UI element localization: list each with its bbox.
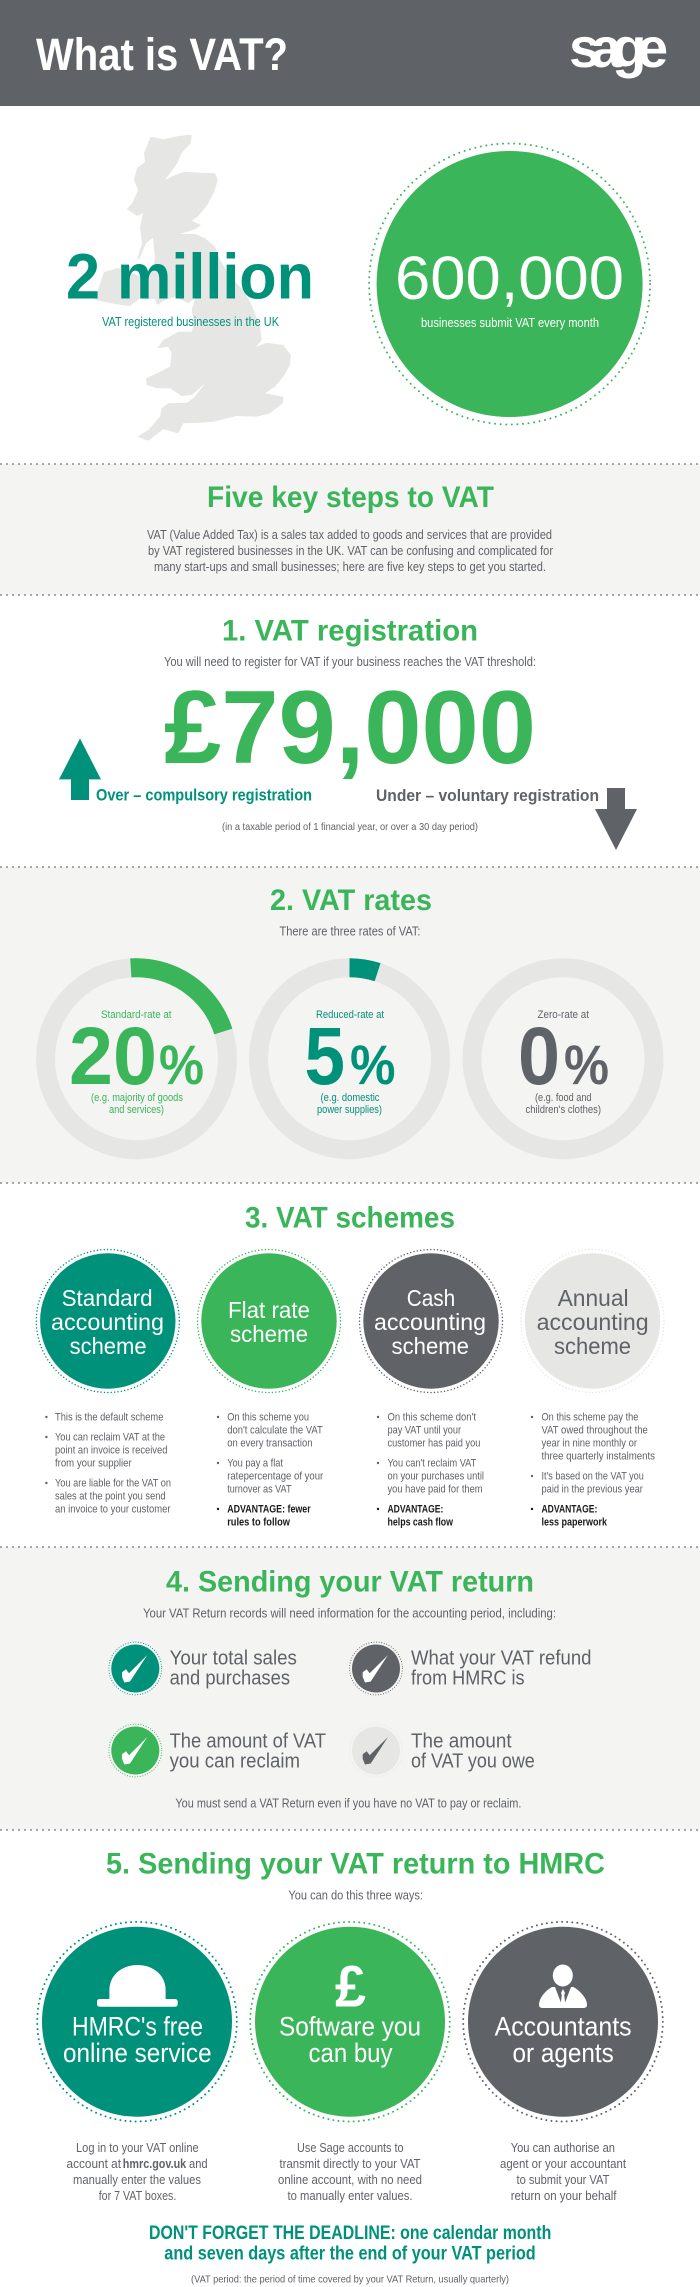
bullets: annual accounting: paid in the previous year — [542, 1484, 643, 1496]
big number: 2 million: 2 million — [66, 240, 314, 312]
bullets: annual accounting: VAT owed throughout the — [542, 1425, 648, 1437]
note: (in a taxable period of 1 financial year, or over a 30 day period) — [222, 821, 478, 833]
circle: flat rate scheme: Flat rate — [228, 1297, 310, 1323]
chart: zero rate ring: 0 — [518, 1011, 560, 1102]
circle: accountants: or agents — [512, 2038, 614, 2068]
text: software: Use Sage accounts to — [297, 2141, 404, 2155]
chart: standard rate ring: 20 — [69, 1011, 157, 1102]
panel: 2. VAT rates — [46, 884, 654, 1150]
panel: 4. Sending your VAT return — [109, 1566, 592, 1810]
intro text: You will need to register for VAT if your business reaches the VAT threshold: — [164, 655, 536, 669]
panel: 3. VAT schemes — [36, 1202, 664, 1529]
circle: standard accounting scheme: accounting — [51, 1309, 164, 1335]
bullets: annual accounting — [531, 1412, 655, 1529]
bullets: annual accounting: On this scheme pay the — [542, 1412, 638, 1424]
bullets: flat rate: You pay a flat — [227, 1458, 283, 1470]
bullets: cash accounting: On this scheme don't — [388, 1412, 476, 1424]
label: over: Over – compulsory registration — [96, 786, 312, 804]
text: HMRC service: for 7 VAT boxes. — [99, 2189, 176, 2203]
circle: flat rate scheme: scheme — [230, 1321, 308, 1347]
text: HMRC service: Log in to your VAT online — [76, 2141, 199, 2155]
item: VAT reclaim — [109, 1724, 326, 1777]
note: (VAT period: the period of time covered by your VAT Return, usually quarterly) — [191, 2274, 509, 2286]
text: HMRC service: account at — [66, 2157, 121, 2171]
heading: 2. VAT rates — [270, 884, 432, 917]
text: accountants: You can authorise an — [511, 2141, 615, 2155]
item: VAT refund: What your VAT refund — [411, 1646, 592, 1669]
chart: zero rate ring — [472, 968, 654, 1150]
text: software — [278, 2141, 422, 2203]
item: total sales: Your total sales — [170, 1646, 297, 1669]
circle: software: Software you — [279, 2011, 421, 2041]
footer note: You must send a VAT Return even if you have no VAT to pay or reclaim. — [175, 1796, 521, 1810]
chart: reduced rate ring: % — [350, 1033, 396, 1096]
circle: HMRC online service: HMRC's free — [72, 2011, 203, 2041]
circle: cash accounting scheme: scheme — [392, 1333, 469, 1359]
circle: accountants: Accountants — [495, 2011, 632, 2041]
bullets: annual accounting: It's based on the VAT you — [542, 1471, 644, 1483]
bullets: standard accounting: from your supplier — [55, 1458, 132, 1470]
big number: threshold: £79,000 — [164, 670, 536, 786]
circle: standard accounting scheme: Standard — [62, 1285, 153, 1311]
circle: HMRC online service: online service — [63, 2038, 212, 2068]
intro text: Your VAT Return records will need information for the accounting period, including: — [143, 1606, 556, 1620]
intro text — [147, 528, 553, 574]
chart: standard rate ring: Standard-rate at — [101, 1009, 172, 1021]
circle: HMRC online service — [37, 1922, 237, 2122]
circle: flat rate scheme — [198, 1250, 340, 1392]
panel: five key steps — [147, 481, 553, 574]
text: HMRC service: and — [189, 2157, 208, 2171]
arrow: up — [59, 738, 101, 800]
circle: accountants — [463, 1922, 663, 2122]
chart: reduced rate ring: power supplies) — [317, 1104, 382, 1116]
item: total sales: and purchases — [170, 1666, 290, 1689]
chart: standard rate ring: (e.g. majority of goods — [91, 1092, 183, 1104]
bullets: cash accounting: pay VAT until your — [388, 1425, 461, 1437]
title: What is VAT? — [36, 29, 288, 80]
icon: person in suit — [539, 1964, 587, 2008]
bullets: standard accounting: You are liable for the VAT on — [55, 1478, 171, 1490]
bullets: cash accounting: you have paid for them — [388, 1484, 483, 1496]
label: under: Under – voluntary registration — [376, 787, 599, 805]
bullets: cash accounting: customer has paid you — [388, 1438, 480, 1450]
text: software: transmit directly to your VAT — [280, 2157, 421, 2171]
arrow: down — [595, 788, 637, 850]
intro text: many start-ups and small businesses; here are five key steps to get you started. — [154, 560, 546, 574]
item: VAT refund — [350, 1642, 592, 1695]
panel: 5. Sending your VAT return to HMRC — [37, 1847, 663, 2286]
item: VAT refund: from HMRC is — [411, 1666, 524, 1689]
chart: zero rate ring: % — [564, 1033, 609, 1096]
icon: UK map — [95, 135, 291, 441]
chart: zero rate ring: Zero-rate at — [538, 1009, 589, 1021]
intro text: VAT (Value Added Tax) is a sales tax added to goods and services that are provided — [147, 528, 552, 542]
bullets: flat rate: ratepercentage of your — [227, 1471, 323, 1483]
heading: 4. Sending your VAT return — [166, 1566, 534, 1599]
heading: 5. Sending your VAT return to HMRC — [106, 1847, 605, 1880]
text: accountants: agent or your accountant — [500, 2157, 626, 2171]
section backgrounds — [0, 464, 700, 1830]
chart: standard rate ring: and services) — [109, 1104, 164, 1116]
bullets: flat rate — [217, 1412, 323, 1529]
callout: deadline: and seven days after the end of your VAT period — [164, 2243, 536, 2264]
bullets: standard accounting: This is the default scheme — [55, 1412, 163, 1424]
bullets: flat rate: on every transaction — [227, 1438, 312, 1450]
circle: cash accounting scheme: accounting — [374, 1309, 486, 1335]
circle: 600,000 — [369, 144, 650, 424]
chart: reduced rate ring: 5 — [304, 1011, 345, 1102]
circle: software: can buy — [308, 2038, 393, 2068]
item: VAT owed: The amount — [411, 1729, 512, 1752]
intro text: You can do this three ways: — [288, 1888, 423, 1902]
item: VAT reclaim: you can reclaim — [170, 1749, 300, 1772]
intro text: There are three rates of VAT: — [280, 925, 420, 939]
heading: 1. VAT registration — [222, 614, 478, 648]
bullets: cash accounting: ADVANTAGE: — [388, 1504, 443, 1516]
chart: zero rate ring: children's clothes) — [526, 1104, 601, 1116]
panel: UK statistics — [66, 135, 650, 441]
bullets: standard accounting: sales at the point you send — [55, 1491, 166, 1503]
intro text: by VAT registered businesses in the UK. VAT can be confusing and complicated for — [148, 544, 553, 558]
circle: standard accounting scheme — [36, 1250, 179, 1392]
callout: deadline: DON'T FORGET THE DEADLINE: one calendar month — [149, 2223, 551, 2244]
bullets: cash accounting: on your purchases until — [388, 1471, 484, 1483]
item: VAT owed — [350, 1724, 535, 1777]
circle: 600,000: 600,000 — [395, 244, 624, 312]
bullets: annual accounting: less paperwork — [542, 1517, 608, 1529]
heading: 3. VAT schemes — [245, 1202, 455, 1235]
circle: annual accounting scheme: scheme — [554, 1333, 631, 1359]
text: software: online account, with no need — [278, 2173, 422, 2187]
circle: cash accounting scheme — [360, 1250, 502, 1392]
sage logo: sage — [569, 16, 667, 79]
chart: reduced rate ring: Reduced-rate at — [316, 1009, 384, 1021]
text: HMRC service: hmrc.gov.uk — [123, 2157, 186, 2171]
item: VAT reclaim: The amount of VAT — [170, 1729, 326, 1752]
panel: 1. VAT registration — [59, 614, 637, 850]
circle: cash accounting scheme: Cash — [407, 1285, 455, 1311]
chart: reduced rate ring: (e.g. domestic — [320, 1092, 380, 1104]
caption: registered businesses: VAT registered businesses in the UK — [102, 314, 279, 329]
bullets: cash accounting — [377, 1412, 484, 1529]
text: accountants — [500, 2141, 626, 2203]
bullets: annual accounting: year in nine monthly or — [542, 1438, 637, 1450]
bullets: flat rate: rules to follow — [227, 1517, 290, 1529]
text: accountants: return on your behalf — [511, 2189, 617, 2203]
chart: standard rate ring: % — [159, 1033, 204, 1096]
bullets: standard accounting — [45, 1412, 171, 1516]
text: HMRC service: manually enter the values — [73, 2173, 201, 2187]
circle: annual accounting scheme: accounting — [537, 1309, 649, 1335]
item: total sales — [109, 1642, 297, 1695]
callout: deadline — [149, 2223, 551, 2264]
bullets: flat rate: On this scheme you — [227, 1412, 309, 1424]
bullets: annual accounting: ADVANTAGE: — [542, 1504, 597, 1516]
icon: bowler hat — [97, 1965, 178, 2007]
chart: zero rate ring: (e.g. food and — [535, 1092, 592, 1104]
circle: annual accounting scheme — [521, 1250, 664, 1392]
circle: software — [250, 1922, 450, 2122]
circle: 600,000: businesses submit VAT every month — [421, 315, 599, 330]
text: software: to manually enter values. — [288, 2189, 412, 2203]
circle: annual accounting scheme: Annual — [558, 1285, 629, 1311]
bullets: standard accounting: You can reclaim VAT at the — [55, 1432, 165, 1444]
bullets: cash accounting: You can't reclaim VAT — [388, 1458, 477, 1470]
bullets: cash accounting: helps cash flow — [388, 1517, 453, 1529]
text: HMRC service — [66, 2141, 208, 2203]
heading: Five key steps to VAT — [207, 481, 494, 514]
circle: standard accounting scheme: scheme — [70, 1333, 147, 1359]
bullets: flat rate: turnover as VAT — [227, 1484, 292, 1496]
icon: pound sign: £ — [335, 1955, 366, 2020]
chart: standard rate ring — [46, 968, 228, 1150]
bullets: flat rate: ADVANTAGE: fewer — [227, 1504, 311, 1516]
bullets: standard accounting: an invoice to your customer — [55, 1504, 171, 1516]
chart: reduced rate ring — [258, 968, 440, 1150]
bullets: standard accounting: point an invoice is received — [55, 1445, 167, 1457]
header banner — [0, 0, 700, 106]
bullets: annual accounting: three quarterly instalments — [542, 1451, 655, 1463]
item: VAT owed: of VAT you owe — [411, 1749, 535, 1772]
bullets: flat rate: don't calculate the VAT — [227, 1425, 323, 1437]
text: accountants: to submit your VAT — [516, 2173, 610, 2187]
